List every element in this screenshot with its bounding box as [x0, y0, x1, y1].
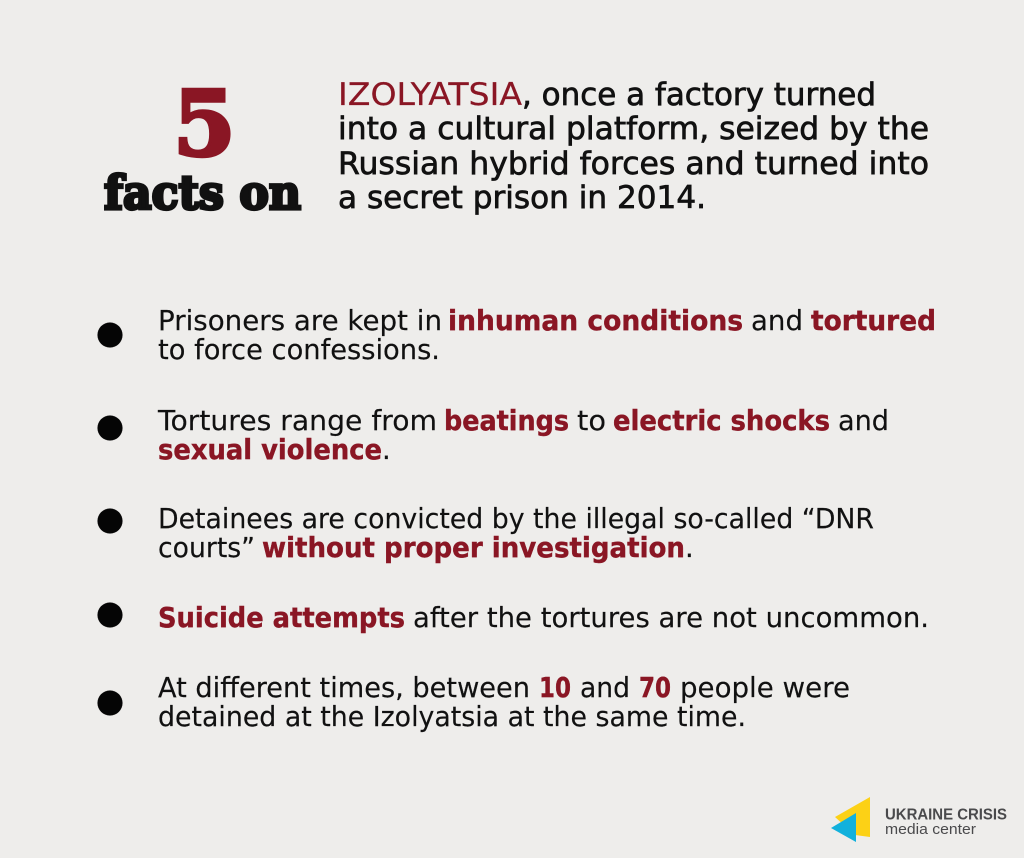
heading: intro statement: , once a factory turned [522, 77, 876, 113]
fact 2: electric shocks [613, 405, 830, 437]
fact 3: Detainees are convicted by the illegal so-called “DNR [158, 503, 874, 535]
fact 3 [98, 503, 874, 564]
fact 1: to force confessions. [158, 334, 440, 366]
title: 5 facts on [104, 71, 301, 221]
bullet 3 [98, 508, 122, 534]
bullet 1 [98, 322, 122, 348]
fact 1: inhuman conditions [448, 305, 743, 337]
fact 5: At different times, between [158, 672, 530, 704]
heading: intro statement [338, 77, 929, 216]
fact 2: . [382, 434, 391, 466]
fact 5 [98, 672, 850, 733]
fact 3: without proper investigation [262, 532, 685, 564]
logo text [885, 806, 1007, 838]
fact 5: 10 [539, 672, 571, 704]
fact 4: Suicide attempts [158, 602, 405, 634]
icon: yellow triangle [835, 797, 870, 837]
title: 5 facts on: facts on [104, 166, 301, 221]
fact 5: 70 [639, 672, 671, 704]
fact 2: and [838, 405, 889, 437]
bullet 4 [98, 602, 122, 628]
fact 2: beatings [444, 405, 569, 437]
icon: blue triangle [831, 813, 856, 842]
title: 5 facts on: 5 [173, 71, 236, 177]
bullet 2 [98, 416, 122, 440]
logo text: UKRAINE CRISIS [885, 806, 1007, 824]
heading: intro statement: IZOLYATSIA [338, 77, 522, 113]
fact 5: people were [680, 672, 850, 704]
fact 5: and [580, 672, 630, 704]
fact 3: courts” [158, 532, 255, 564]
heading: intro statement: a secret prison in 2014. [338, 180, 706, 216]
heading: intro statement: into a cultural platform, seized by the [338, 111, 929, 147]
fact 4 [98, 602, 929, 634]
fact 2 [98, 405, 889, 466]
heading: intro statement: Russian hybrid forces and turned into [338, 146, 929, 182]
fact 1 [98, 305, 936, 366]
fact 1: and [751, 305, 803, 337]
fact 1: Prisoners are kept in [158, 305, 442, 337]
fact 2: Tortures range from [157, 405, 437, 437]
fact 2: to [577, 405, 606, 437]
logo text: media center [885, 821, 976, 838]
fact 1: tortured [811, 305, 936, 337]
fact 3: . [685, 532, 694, 564]
bullet 5 [98, 690, 122, 716]
fact 4: after the tortures are not uncommon. [413, 602, 929, 634]
fact 5: detained at the Izolyatsia at the same time. [158, 701, 746, 733]
logo: Ukraine Crisis Media Center [831, 797, 1007, 842]
fact 2: sexual violence [158, 434, 382, 466]
